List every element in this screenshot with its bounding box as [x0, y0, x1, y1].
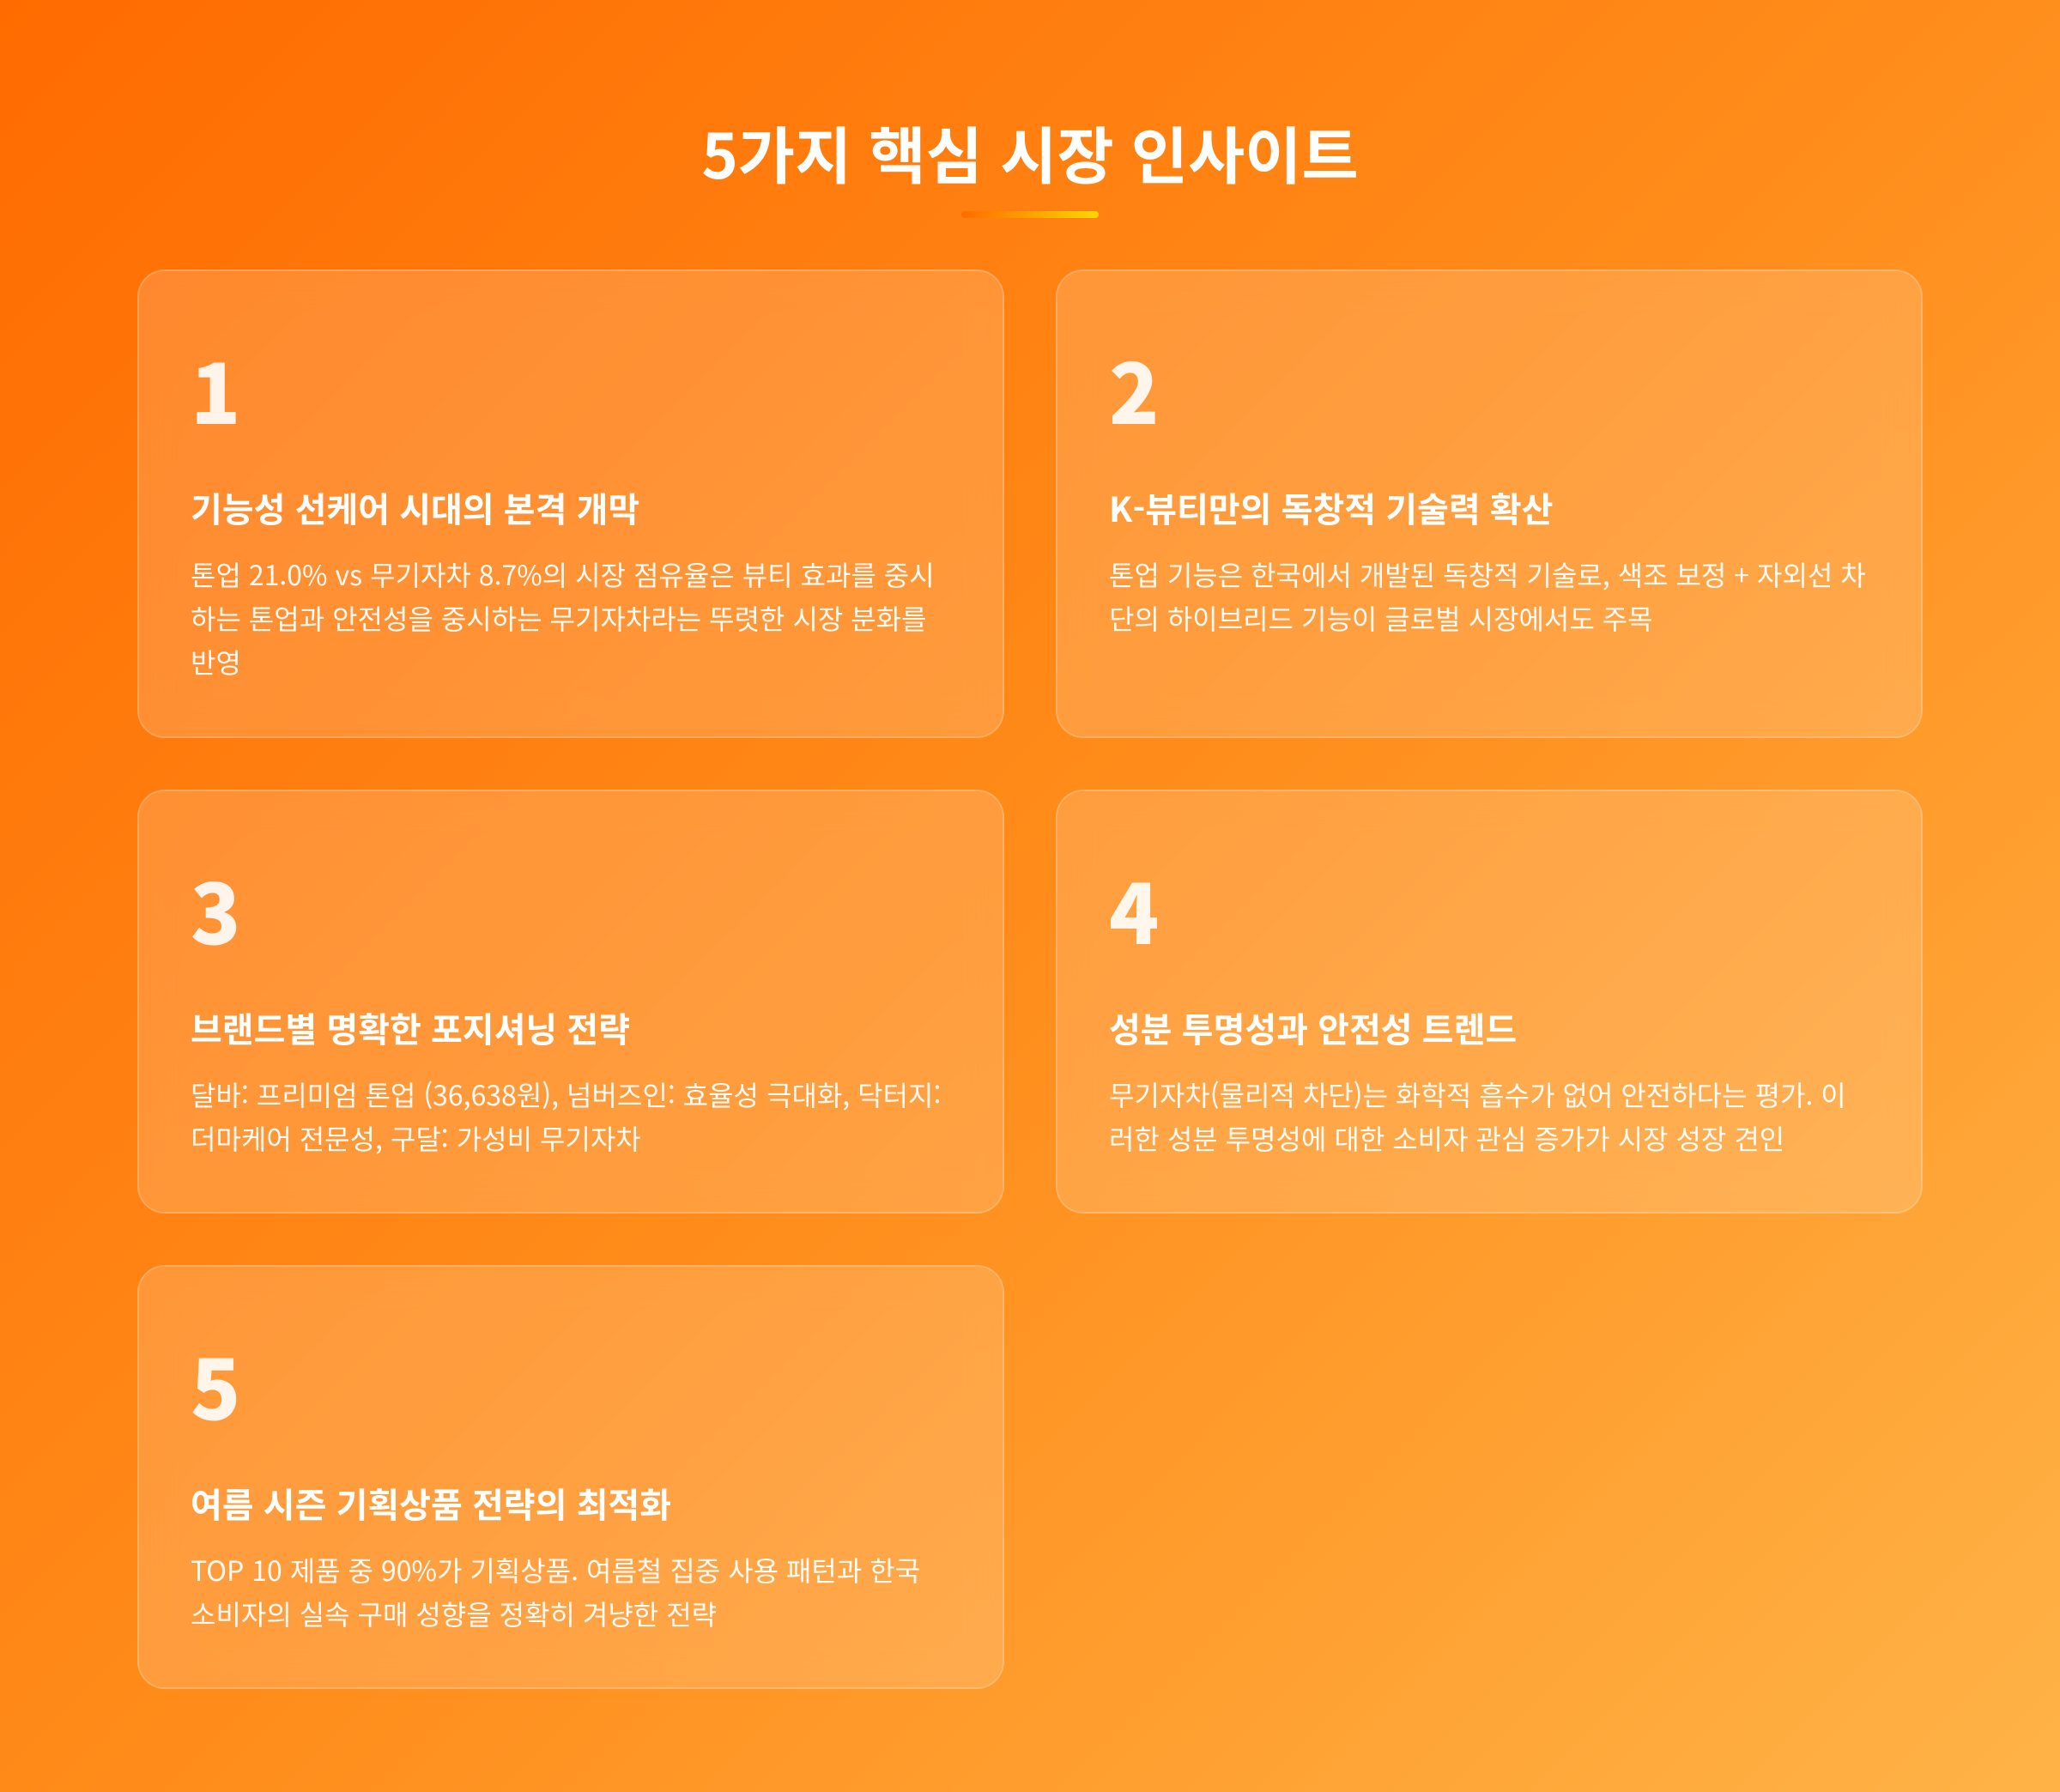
body text 5: 소비자의 실속 구매 성향을 정확히 겨냥한 전략: [191, 1594, 717, 1633]
panel: insight 3: [137, 790, 1004, 1214]
panel: insight 5: [137, 1265, 1004, 1689]
panel: insight 4: [1056, 790, 1923, 1214]
body text 1: 반영: [191, 642, 241, 681]
panel: insight 2: [1056, 269, 1923, 738]
number 5: 5: [191, 1324, 240, 1444]
body text 1: 톤업 21.0% vs 무기자차 8.7%의 시장 점유율은 뷰티 효과를 중시: [191, 554, 935, 594]
body text 3: 달바: 프리미엄 톤업 (36,638원), 넘버즈인: 효율성 극대화, 닥터지:: [191, 1075, 941, 1114]
body text 3: [191, 1075, 941, 1158]
title underline accent: [961, 211, 1099, 218]
title: 5가지 핵심 시장 인사이트: [701, 106, 1359, 197]
body text 4: 러한 성분 투명성에 대한 소비자 관심 증가가 시장 성장 견인: [1109, 1118, 1784, 1158]
body text 3: 더마케어 전문성, 구달: 가성비 무기자차: [191, 1118, 641, 1158]
body text 5: TOP 10 제품 중 90%가 기획상품. 여름철 집중 사용 패턴과 한국: [191, 1550, 920, 1589]
body text 2: 단의 하이브리드 기능이 글로벌 시장에서도 주목: [1109, 598, 1653, 638]
heading 4: 성분 투명성과 안전성 트렌드: [1109, 1002, 1517, 1052]
heading 5: 여름 시즌 기획상품 전략의 최적화: [191, 1478, 671, 1528]
body text 1: [191, 554, 935, 681]
body text 4: 무기자차(물리적 차단)는 화학적 흡수가 없어 안전하다는 평가. 이: [1109, 1075, 1846, 1114]
number 2: 2: [1109, 329, 1159, 448]
body text 1: 하는 톤업과 안전성을 중시하는 무기자차라는 뚜렷한 시장 분화를: [191, 598, 927, 638]
heading 3: 브랜드별 명확한 포지셔닝 전략: [191, 1002, 630, 1052]
body text 2: [1109, 554, 1866, 638]
heading 2: K-뷰티만의 독창적 기술력 확산: [1109, 482, 1553, 532]
number 1: 1: [191, 329, 240, 448]
body text 4: [1109, 1075, 1846, 1158]
body text 5: [191, 1550, 920, 1633]
number 4: 4: [1109, 849, 1159, 968]
number 3: 3: [191, 849, 240, 968]
panel: insight 1: [137, 269, 1004, 738]
heading 1: 기능성 선케어 시대의 본격 개막: [191, 482, 639, 532]
body text 2: 톤업 기능은 한국에서 개발된 독창적 기술로, 색조 보정 + 자외선 차: [1109, 554, 1866, 594]
